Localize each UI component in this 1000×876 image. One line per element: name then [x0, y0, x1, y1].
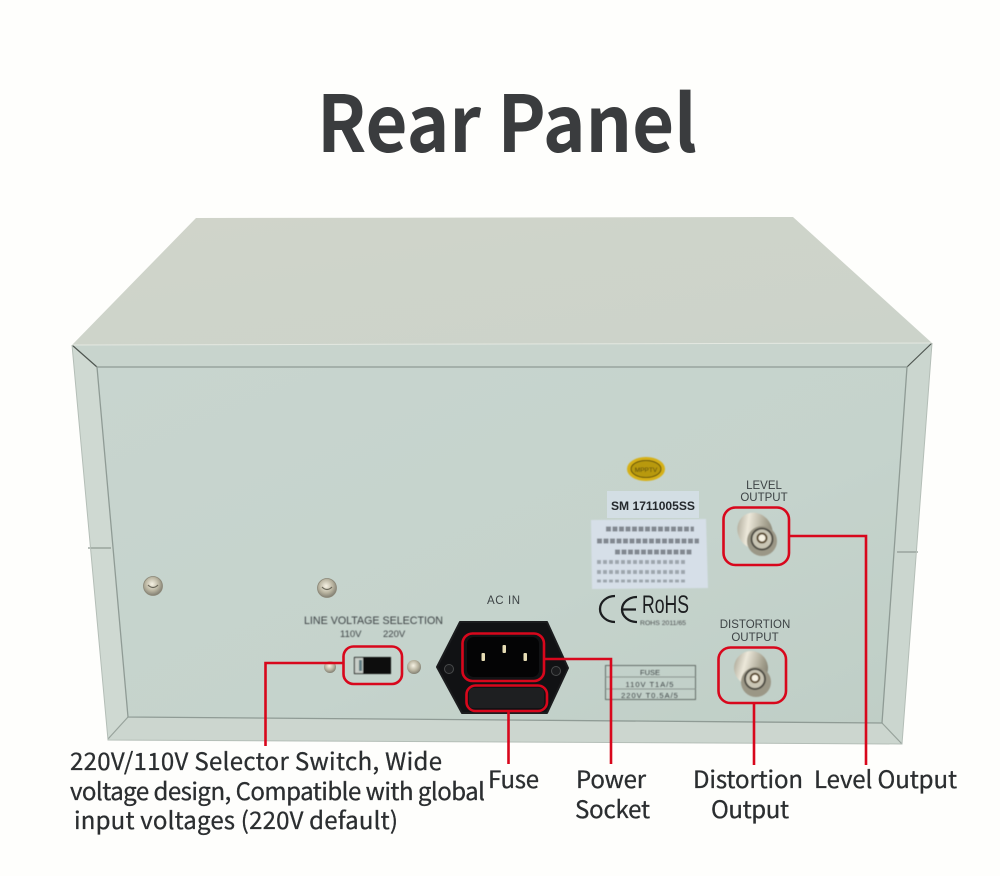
- label: selector switch description: 220V/110V Selector Switch, Wide: [70, 742, 442, 777]
- voltage selector switch: [354, 657, 391, 674]
- label: selector switch description: voltage design, Compatible with global: [70, 772, 485, 807]
- fuse rating table: [605, 666, 696, 700]
- serial number sticker: [607, 491, 699, 518]
- callout: selector switch: [266, 646, 402, 746]
- top cover: [72, 217, 932, 345]
- fuse rating table: FUSE: [640, 668, 660, 677]
- label: distortion output: Output: [711, 790, 789, 825]
- device enclosure: [72, 217, 932, 744]
- fuse rating table: 220V T0.5A/5: [621, 691, 679, 700]
- specification sticker: [591, 519, 708, 589]
- callout: distortion output: [718, 648, 786, 765]
- callout: fuse: [466, 686, 547, 764]
- AC IN label: AC IN: [487, 595, 521, 607]
- label: power socket: Power: [576, 760, 647, 795]
- label: level output: Level Output: [814, 760, 957, 795]
- voltage selection label: 110V: [340, 629, 362, 640]
- label: distortion output: Distortion: [693, 760, 803, 795]
- distortion output connector label: [720, 619, 790, 644]
- distortion output connector label: DISTORTION: [720, 619, 790, 631]
- title: Rear Panel: [317, 63, 697, 175]
- rear frame: [72, 343, 932, 744]
- callout: power socket: [462, 634, 611, 764]
- voltage selection label: 220V: [383, 629, 406, 640]
- voltage selection label: [304, 615, 443, 640]
- distortion output connector label: OUTPUT: [731, 632, 779, 644]
- rear plate: [97, 367, 907, 723]
- distortion output BNC connector: [728, 645, 774, 697]
- level output connector label: LEVEL: [746, 480, 783, 492]
- serial number sticker: SM 1711005SS: [611, 499, 695, 513]
- AC power inlet with fuse holder: [437, 622, 568, 713]
- level output connector label: OUTPUT: [740, 492, 788, 504]
- certification mark badge: MPPTV: [635, 467, 658, 474]
- CE and RoHS marks: [600, 591, 689, 627]
- mounting screws: [144, 576, 421, 674]
- CE and RoHS marks: ROHS 2011/65: [640, 620, 686, 627]
- level output BNC connector: [730, 506, 780, 556]
- label: distortion output: [693, 760, 803, 825]
- level output connector label: [740, 480, 788, 504]
- callout: level output: [724, 508, 866, 765]
- label: fuse: Fuse: [488, 760, 539, 795]
- certification mark badge: [627, 457, 665, 481]
- CE and RoHS marks: RoHS: [642, 591, 689, 619]
- label: power socket: Socket: [575, 790, 650, 825]
- fuse rating table: 110V T1A/5: [626, 680, 674, 689]
- label: selector switch description: [70, 742, 485, 836]
- voltage selection label: LINE VOLTAGE SELECTION: [304, 615, 443, 627]
- label: selector switch description: input voltages (220V default): [74, 801, 398, 836]
- label: power socket: [575, 760, 650, 825]
